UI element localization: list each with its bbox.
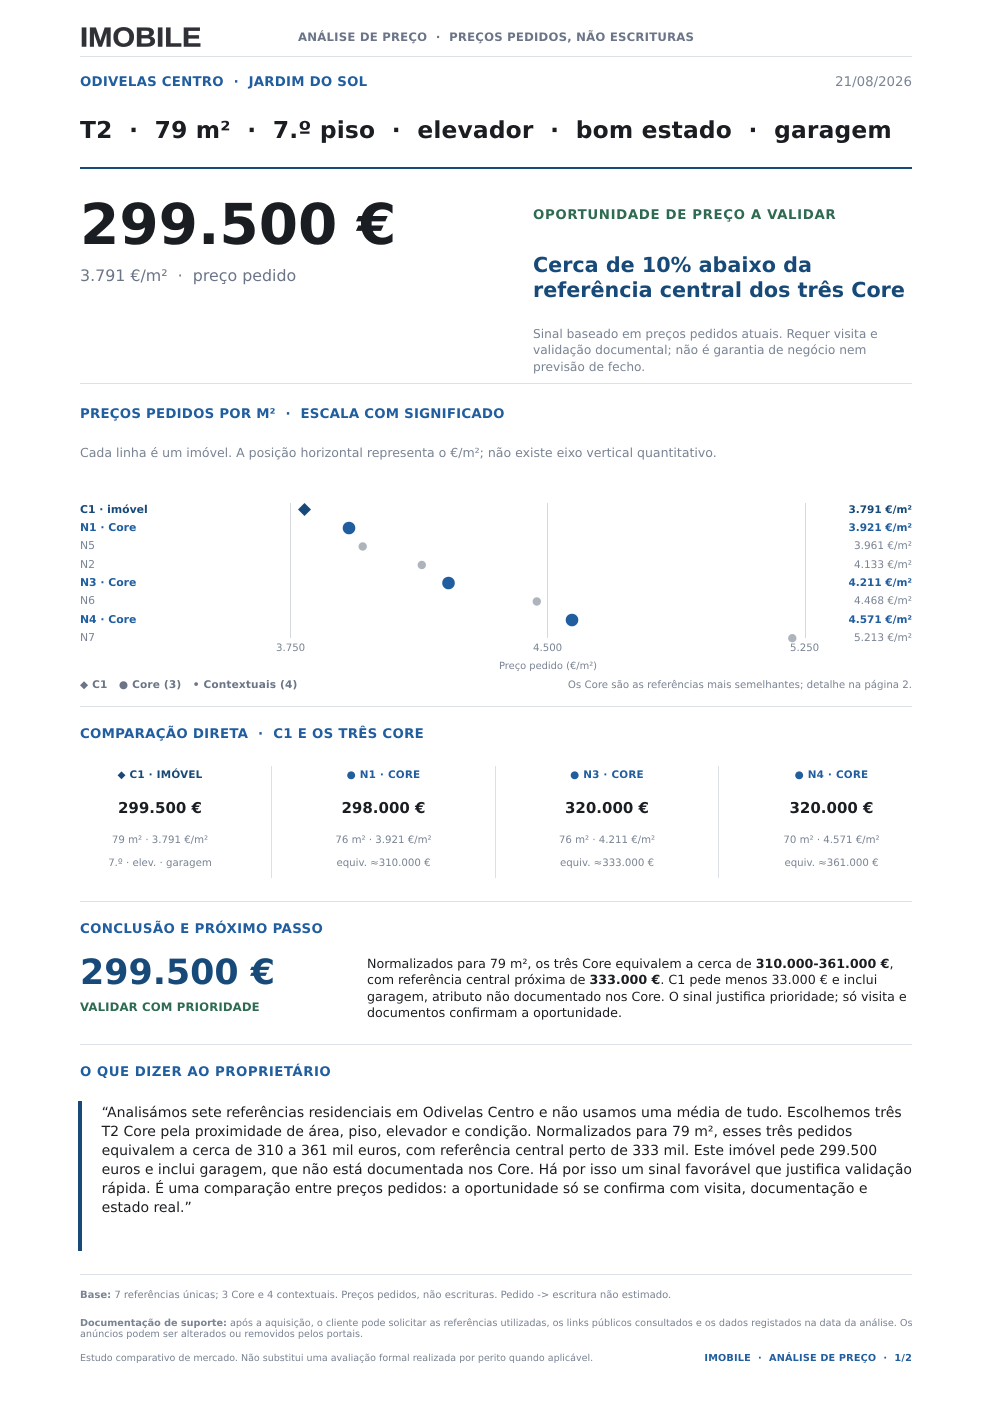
footnote: documentation: [80, 1318, 913, 1340]
dot chart: 5.250: [790, 643, 819, 654]
row labels: C1 · imóvel: [80, 503, 148, 516]
row values: 5.213 €/m²: [854, 632, 912, 644]
chart intro: Cada linha é um imóvel. A posição horizontal representa o €/m²; não existe eixo vertical quantitativo.: [80, 445, 717, 460]
conclusion text: documentos confirmam a oportunidade.: [367, 1005, 622, 1020]
column: N3: 76 m² · 4.211 €/m²: [559, 835, 655, 846]
opportunity label: OPORTUNIDADE DE PREÇO A VALIDAR: [533, 208, 836, 223]
opportunity headline: [533, 253, 905, 302]
heading: owner script: O QUE DIZER AO PROPRIETÁRIO: [80, 1065, 331, 1080]
column: C1: ◆ C1 · IMÓVEL: [117, 769, 203, 781]
quote text: estado real.”: [102, 1200, 192, 1216]
main price: 299.500 €: [80, 193, 396, 258]
opportunity note: [533, 327, 878, 374]
column: C1: 7.º · elev. · garagem: [108, 858, 212, 869]
opportunity note: previsão de fecho.: [533, 360, 645, 374]
column: N3: [559, 769, 655, 869]
price per m2: 3.791 €/m² · preço pedido: [80, 266, 296, 285]
row labels: N5: [80, 539, 95, 552]
opportunity headline: referência central dos três Core: [533, 278, 905, 302]
chart note: Os Core são as referências mais semelhantes; detalhe na página 2.: [568, 680, 912, 691]
footer brand: IMOBILE · ANÁLISE DE PREÇO · 1/2: [704, 1353, 912, 1364]
column: C1: [108, 768, 212, 869]
quote text: euros e inclui garagem, que não está documentada nos Core. Há por isso um sinal favorável que justifica validação: [102, 1162, 912, 1178]
column: N4: 320.000 €: [790, 799, 873, 817]
quote text: T2 Core pela proximidade de área, piso, elevador e condição. Normalizados para 79 m², esses três pedidos: [102, 1124, 852, 1140]
quote text: rápida. É uma comparação entre preços pedidos: a oportunidade só se confirma com visita, documentação e: [102, 1181, 867, 1197]
footnote: documentation: anúncios podem ser alterados ou removidos pelos portais.: [80, 1328, 363, 1340]
axis title: Preço pedido (€/m²): [499, 661, 597, 672]
location: ODIVELAS CENTRO · JARDIM DO SOL: [80, 75, 367, 90]
row values: 4.133 €/m²: [854, 559, 912, 571]
row values: 4.571 €/m²: [848, 614, 912, 626]
logo: IMOBILE: [80, 21, 201, 52]
footnote: base: Base: 7 referências únicas; 3 Core e 4 contextuais. Preços pedidos, não escrituras. Pedido -> escritura não estimado.: [80, 1290, 671, 1301]
quote: [78, 1101, 912, 1251]
axis ticks: 3.750: [276, 643, 305, 654]
date: 21/08/2026: [835, 75, 912, 90]
heading: comparison: COMPARAÇÃO DIRETA · C1 E OS TRÊS CORE: [80, 727, 424, 742]
dot chart: [80, 503, 912, 672]
footnote: disclaimer: Estudo comparativo de mercado. Não substitui uma avaliação formal realizada por perito quando aplicável.: [80, 1353, 593, 1364]
column: N4: [783, 769, 880, 869]
row values: 3.791 €/m²: [848, 504, 912, 516]
plot: [290, 503, 806, 642]
column: N1: [335, 769, 432, 869]
column: N3: 320.000 €: [565, 799, 649, 817]
row values: [848, 504, 912, 644]
conclusion text: com referência central próxima de 333.000 €. C1 pede menos 33.000 € e inclui: [367, 972, 877, 987]
footnote: documentation: Documentação de suporte: após a aquisição, o cliente pode solicitar as referências utilizadas, os links públicos consultados e os dados registados na data da análise. Os: [80, 1318, 913, 1329]
heading: scale: PREÇOS PEDIDOS POR M² · ESCALA COM SIGNIFICADO: [80, 407, 505, 422]
row labels: [80, 503, 148, 644]
conclusion verdict: VALIDAR COM PRIORIDADE: [80, 1000, 260, 1014]
conclusion text: [367, 956, 907, 1020]
opportunity note: validação documental; não é garantia de negócio nem: [533, 343, 866, 357]
column: N4: 70 m² · 4.571 €/m²: [783, 835, 880, 846]
column: N1: 298.000 €: [342, 799, 425, 817]
opportunity note: Sinal baseado em preços pedidos atuais. Requer visita e: [533, 327, 878, 341]
header label: ANÁLISE DE PREÇO · PREÇOS PEDIDOS, NÃO ESCRITURAS: [298, 30, 694, 44]
quote text: “Analisámos sete referências residenciais em Odivelas Centro e não usamos uma média de tudo. Escolhemos três: [102, 1105, 902, 1121]
dot chart: 4.500: [533, 643, 562, 654]
legend: ◆ C1 ● Core (3) • Contextuais (4): [80, 679, 297, 691]
column: N4: ● N4 · CORE: [795, 769, 868, 781]
column: N1: 76 m² · 3.921 €/m²: [335, 835, 432, 846]
conclusion text: garagem, atributo não documentado nos Core. O sinal justifica prioridade; só visita e: [367, 989, 907, 1004]
opportunity headline: Cerca de 10% abaixo da: [533, 253, 812, 277]
row labels: N3 · Core: [80, 576, 136, 589]
column: C1: 79 m² · 3.791 €/m²: [112, 835, 208, 846]
quote text: [102, 1105, 912, 1216]
column: N3: ● N3 · CORE: [570, 769, 644, 781]
conclusion price: 299.500 €: [80, 953, 275, 993]
column: N4: equiv. ≈361.000 €: [784, 858, 879, 869]
column: C1: 299.500 €: [118, 799, 202, 817]
quote text: equivalem a cerca de 310 a 361 mil euros, com referência central perto de 333 mil. Este imóvel pede 299.500: [102, 1143, 877, 1159]
column: N1: ● N1 · CORE: [347, 769, 420, 781]
row labels: N4 · Core: [80, 613, 136, 626]
row labels: N1 · Core: [80, 521, 136, 534]
row values: 3.921 €/m²: [848, 522, 912, 534]
column: N1: equiv. ≈310.000 €: [336, 858, 431, 869]
heading: conclusion: CONCLUSÃO E PRÓXIMO PASSO: [80, 922, 323, 937]
row labels: N7: [80, 631, 95, 644]
column: N3: equiv. ≈333.000 €: [560, 858, 654, 869]
row labels: N6: [80, 594, 95, 607]
row labels: N2: [80, 558, 95, 571]
conclusion text: Normalizados para 79 m², os três Core equivalem a cerca de 310.000-361.000 €,: [367, 956, 894, 971]
property title: T2 · 79 m² · 7.º piso · elevador · bom estado · garagem: [80, 116, 892, 144]
row values: 3.961 €/m²: [854, 540, 912, 552]
row values: 4.468 €/m²: [854, 595, 912, 607]
row values: 4.211 €/m²: [848, 577, 912, 589]
comparison table: [271, 766, 719, 878]
